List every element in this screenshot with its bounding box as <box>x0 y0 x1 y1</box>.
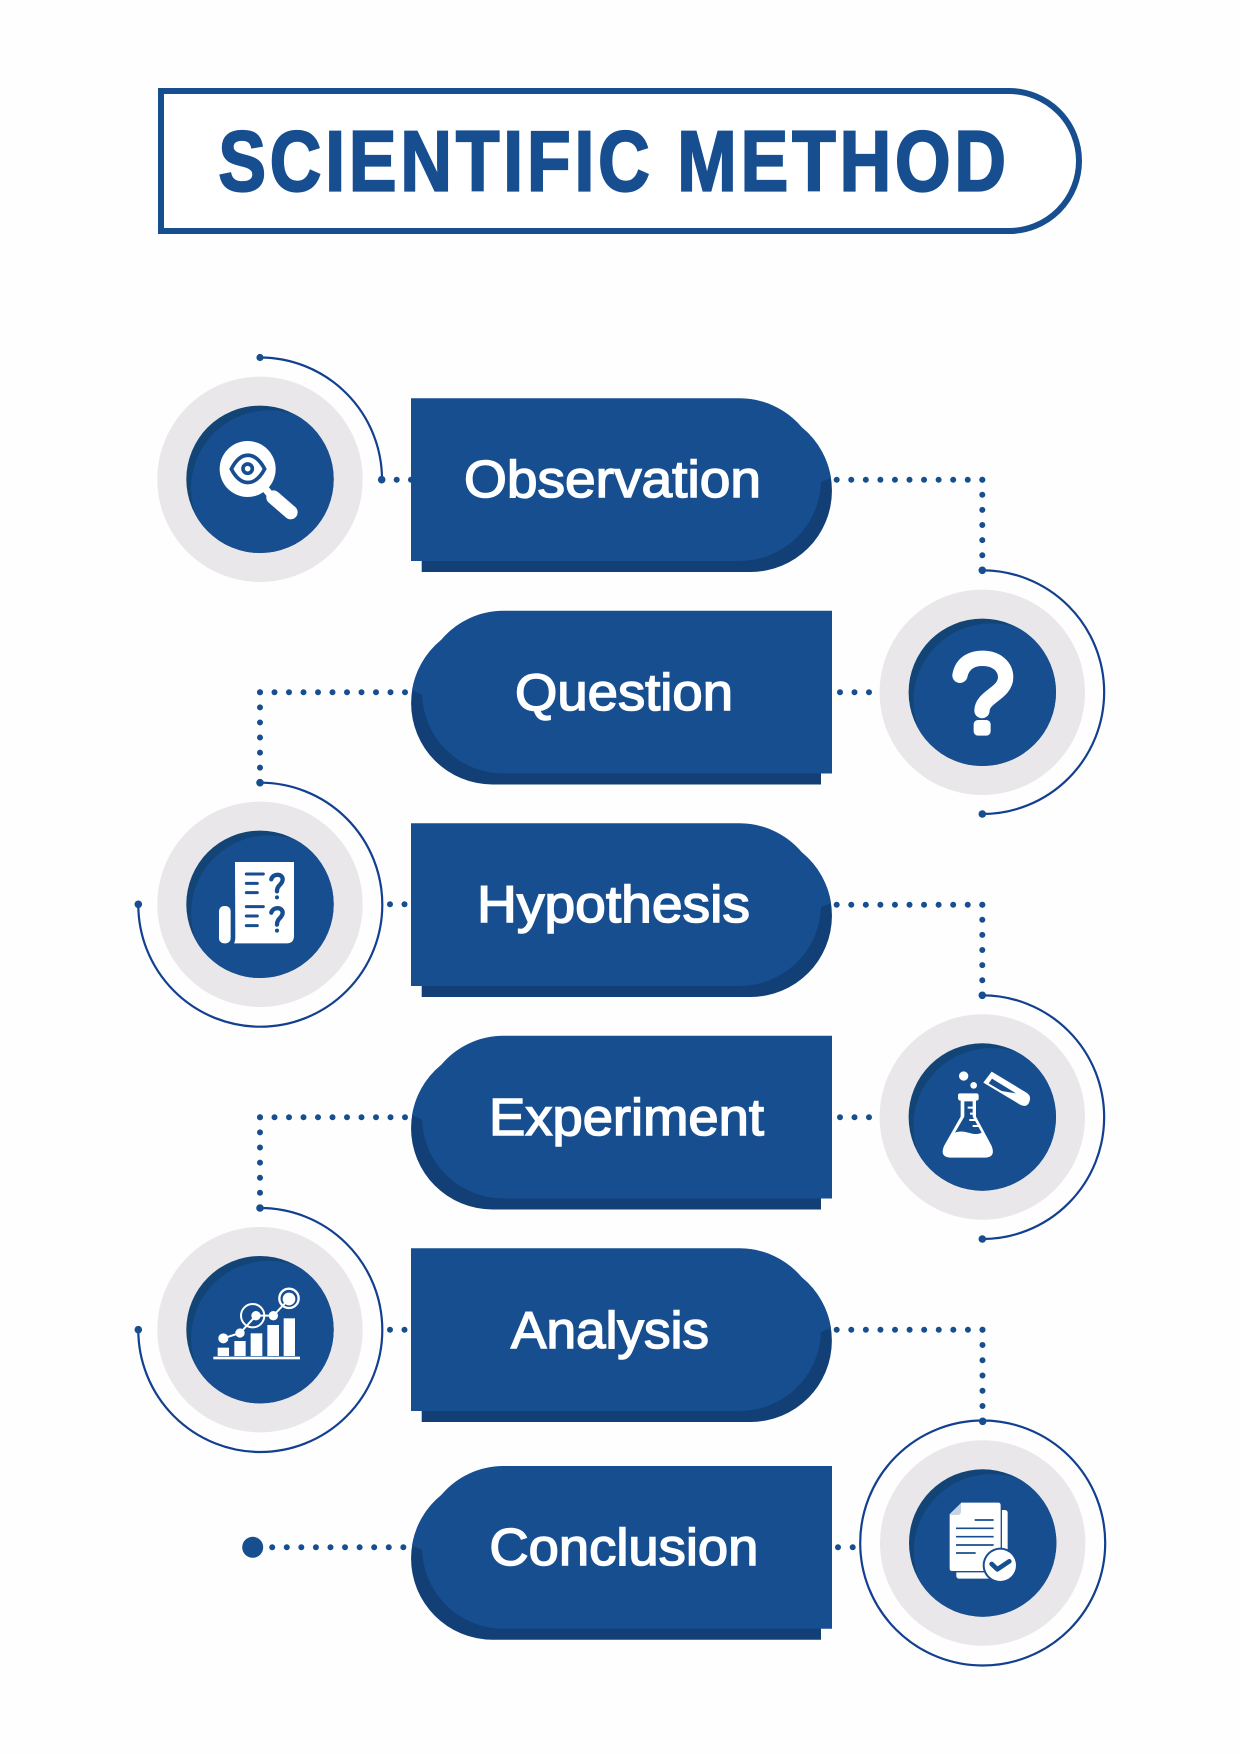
icon: question mark <box>880 590 1085 795</box>
icon: hypothesis document <box>157 802 363 1007</box>
panel: experiment: Experiment <box>489 1089 765 1147</box>
arc: observation <box>256 354 414 484</box>
panel: hypothesis <box>411 823 832 997</box>
arc: hypothesis <box>134 779 382 1027</box>
arc: conclusion <box>860 1418 1105 1666</box>
arc: question <box>978 566 1104 818</box>
panel: observation: Observation <box>464 451 761 509</box>
arc: analysis <box>134 1204 382 1452</box>
panel: observation <box>411 398 832 572</box>
arc: experiment <box>978 992 1104 1243</box>
icon: flask and test tube <box>880 1014 1085 1220</box>
panel: question <box>411 611 832 784</box>
panel: analysis: Analysis <box>511 1302 709 1360</box>
connector: conclusion end <box>242 1537 853 1558</box>
title <box>161 91 1079 231</box>
connector: observation to question <box>837 480 983 571</box>
panel: conclusion: Conclusion <box>489 1519 758 1577</box>
connector: experiment to analysis <box>260 1117 870 1209</box>
panel: analysis <box>411 1248 832 1422</box>
title: SCIENTIFIC METHOD <box>218 114 1010 209</box>
panel: experiment <box>411 1036 832 1210</box>
icon: document with check <box>880 1440 1085 1646</box>
connector: question to hypothesis <box>260 692 870 784</box>
panel: hypothesis: Hypothesis <box>477 876 750 934</box>
panel: conclusion <box>411 1466 832 1640</box>
connector: analysis to conclusion <box>390 1330 983 1422</box>
icon: magnifying glass with eye <box>157 377 363 582</box>
connector: hypothesis to experiment <box>390 904 983 996</box>
panel: question: Question <box>515 664 733 722</box>
icon: chart <box>157 1227 363 1432</box>
